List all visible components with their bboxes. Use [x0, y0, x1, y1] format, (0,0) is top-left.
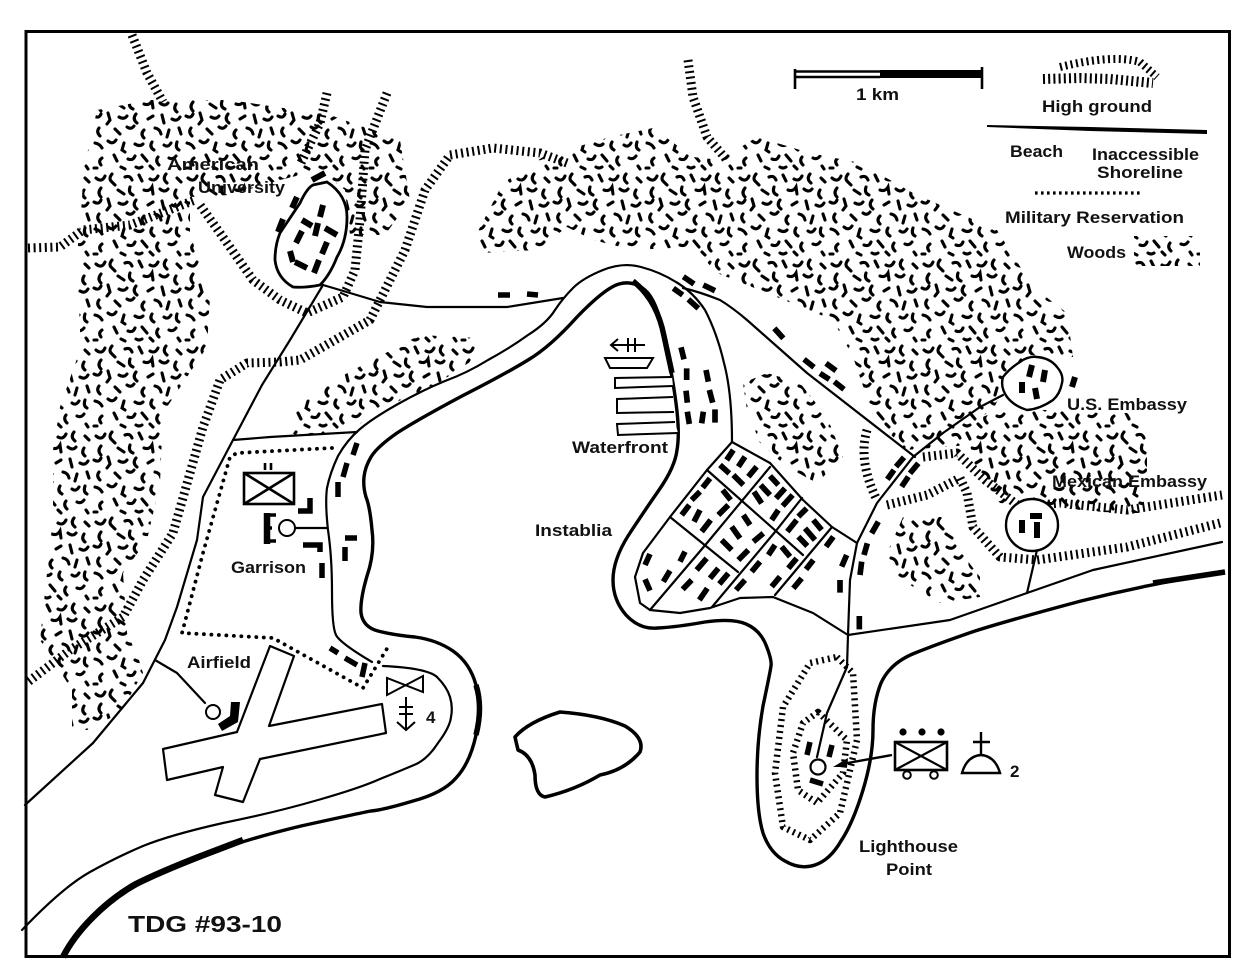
scale bar — [795, 67, 982, 104]
vehicles along west road — [330, 443, 365, 677]
garrison symbols — [244, 463, 357, 578]
label: American University: American — [167, 155, 259, 174]
legend: shoreline types — [987, 125, 1207, 182]
unit symbol: battalion — [244, 463, 294, 504]
title: TDG number: TDG #93-10 — [128, 911, 282, 937]
legend: shoreline types: Beach — [1010, 142, 1063, 161]
military reservation boundary — [182, 448, 388, 688]
woods: western forest — [40, 100, 410, 730]
label: Lighthouse Point — [859, 837, 958, 879]
label: Airfield: Airfield — [187, 653, 251, 672]
label: American University: University — [198, 178, 286, 197]
high ground contours — [28, 35, 1222, 840]
label: Waterfront: Waterfront — [572, 438, 668, 457]
woods: north of garrison — [285, 335, 477, 437]
island — [515, 712, 641, 797]
legend: shoreline types: Shoreline — [1097, 163, 1183, 182]
naval symbols: 4 — [426, 708, 436, 727]
unit symbol with arrow — [833, 728, 947, 779]
label: Garrison: Garrison — [231, 558, 306, 577]
shoreline — [63, 281, 1225, 957]
label: American University — [167, 155, 286, 197]
legend: military reservation: Military Reservation — [1005, 208, 1184, 227]
naval symbols — [387, 676, 436, 730]
label: Instablia: Instablia — [535, 521, 613, 540]
engineer mound symbol: 2 — [1010, 762, 1019, 781]
U.S. Embassy compound — [1002, 357, 1075, 410]
woods: south of embassy road — [887, 517, 980, 603]
legend: shoreline types: Inaccessible — [1092, 145, 1199, 164]
town street grid — [635, 442, 857, 635]
American University compound — [275, 173, 347, 287]
roads — [22, 265, 1222, 930]
label: Mexican Embassy: Mexican Embassy — [1052, 472, 1208, 491]
legend: high ground: High ground — [1042, 97, 1152, 116]
woods: northern ridge — [475, 128, 1073, 450]
road-side vehicles at northern road — [498, 294, 538, 295]
label: Lighthouse Point: Lighthouse — [859, 837, 958, 856]
legend: woods — [1067, 236, 1200, 266]
engineer mound symbol — [962, 732, 1019, 781]
label: Lighthouse Point: Point — [886, 860, 932, 879]
Lighthouse Point installation — [807, 742, 832, 784]
legend: high ground — [1042, 59, 1157, 116]
airfield facility — [155, 660, 240, 731]
airfield runways — [163, 646, 386, 802]
scale bar: 1 km — [856, 85, 899, 104]
label: U.S. Embassy: U.S. Embassy — [1067, 395, 1188, 414]
woods: east of town — [743, 373, 843, 483]
woods: embassy district — [970, 410, 1147, 513]
vehicles and buildings in waterfront, town and along roads — [645, 277, 918, 629]
Mexican Embassy compound — [1006, 499, 1058, 551]
legend: woods: Woods — [1067, 243, 1126, 262]
waterfront piers and ship — [605, 338, 678, 435]
